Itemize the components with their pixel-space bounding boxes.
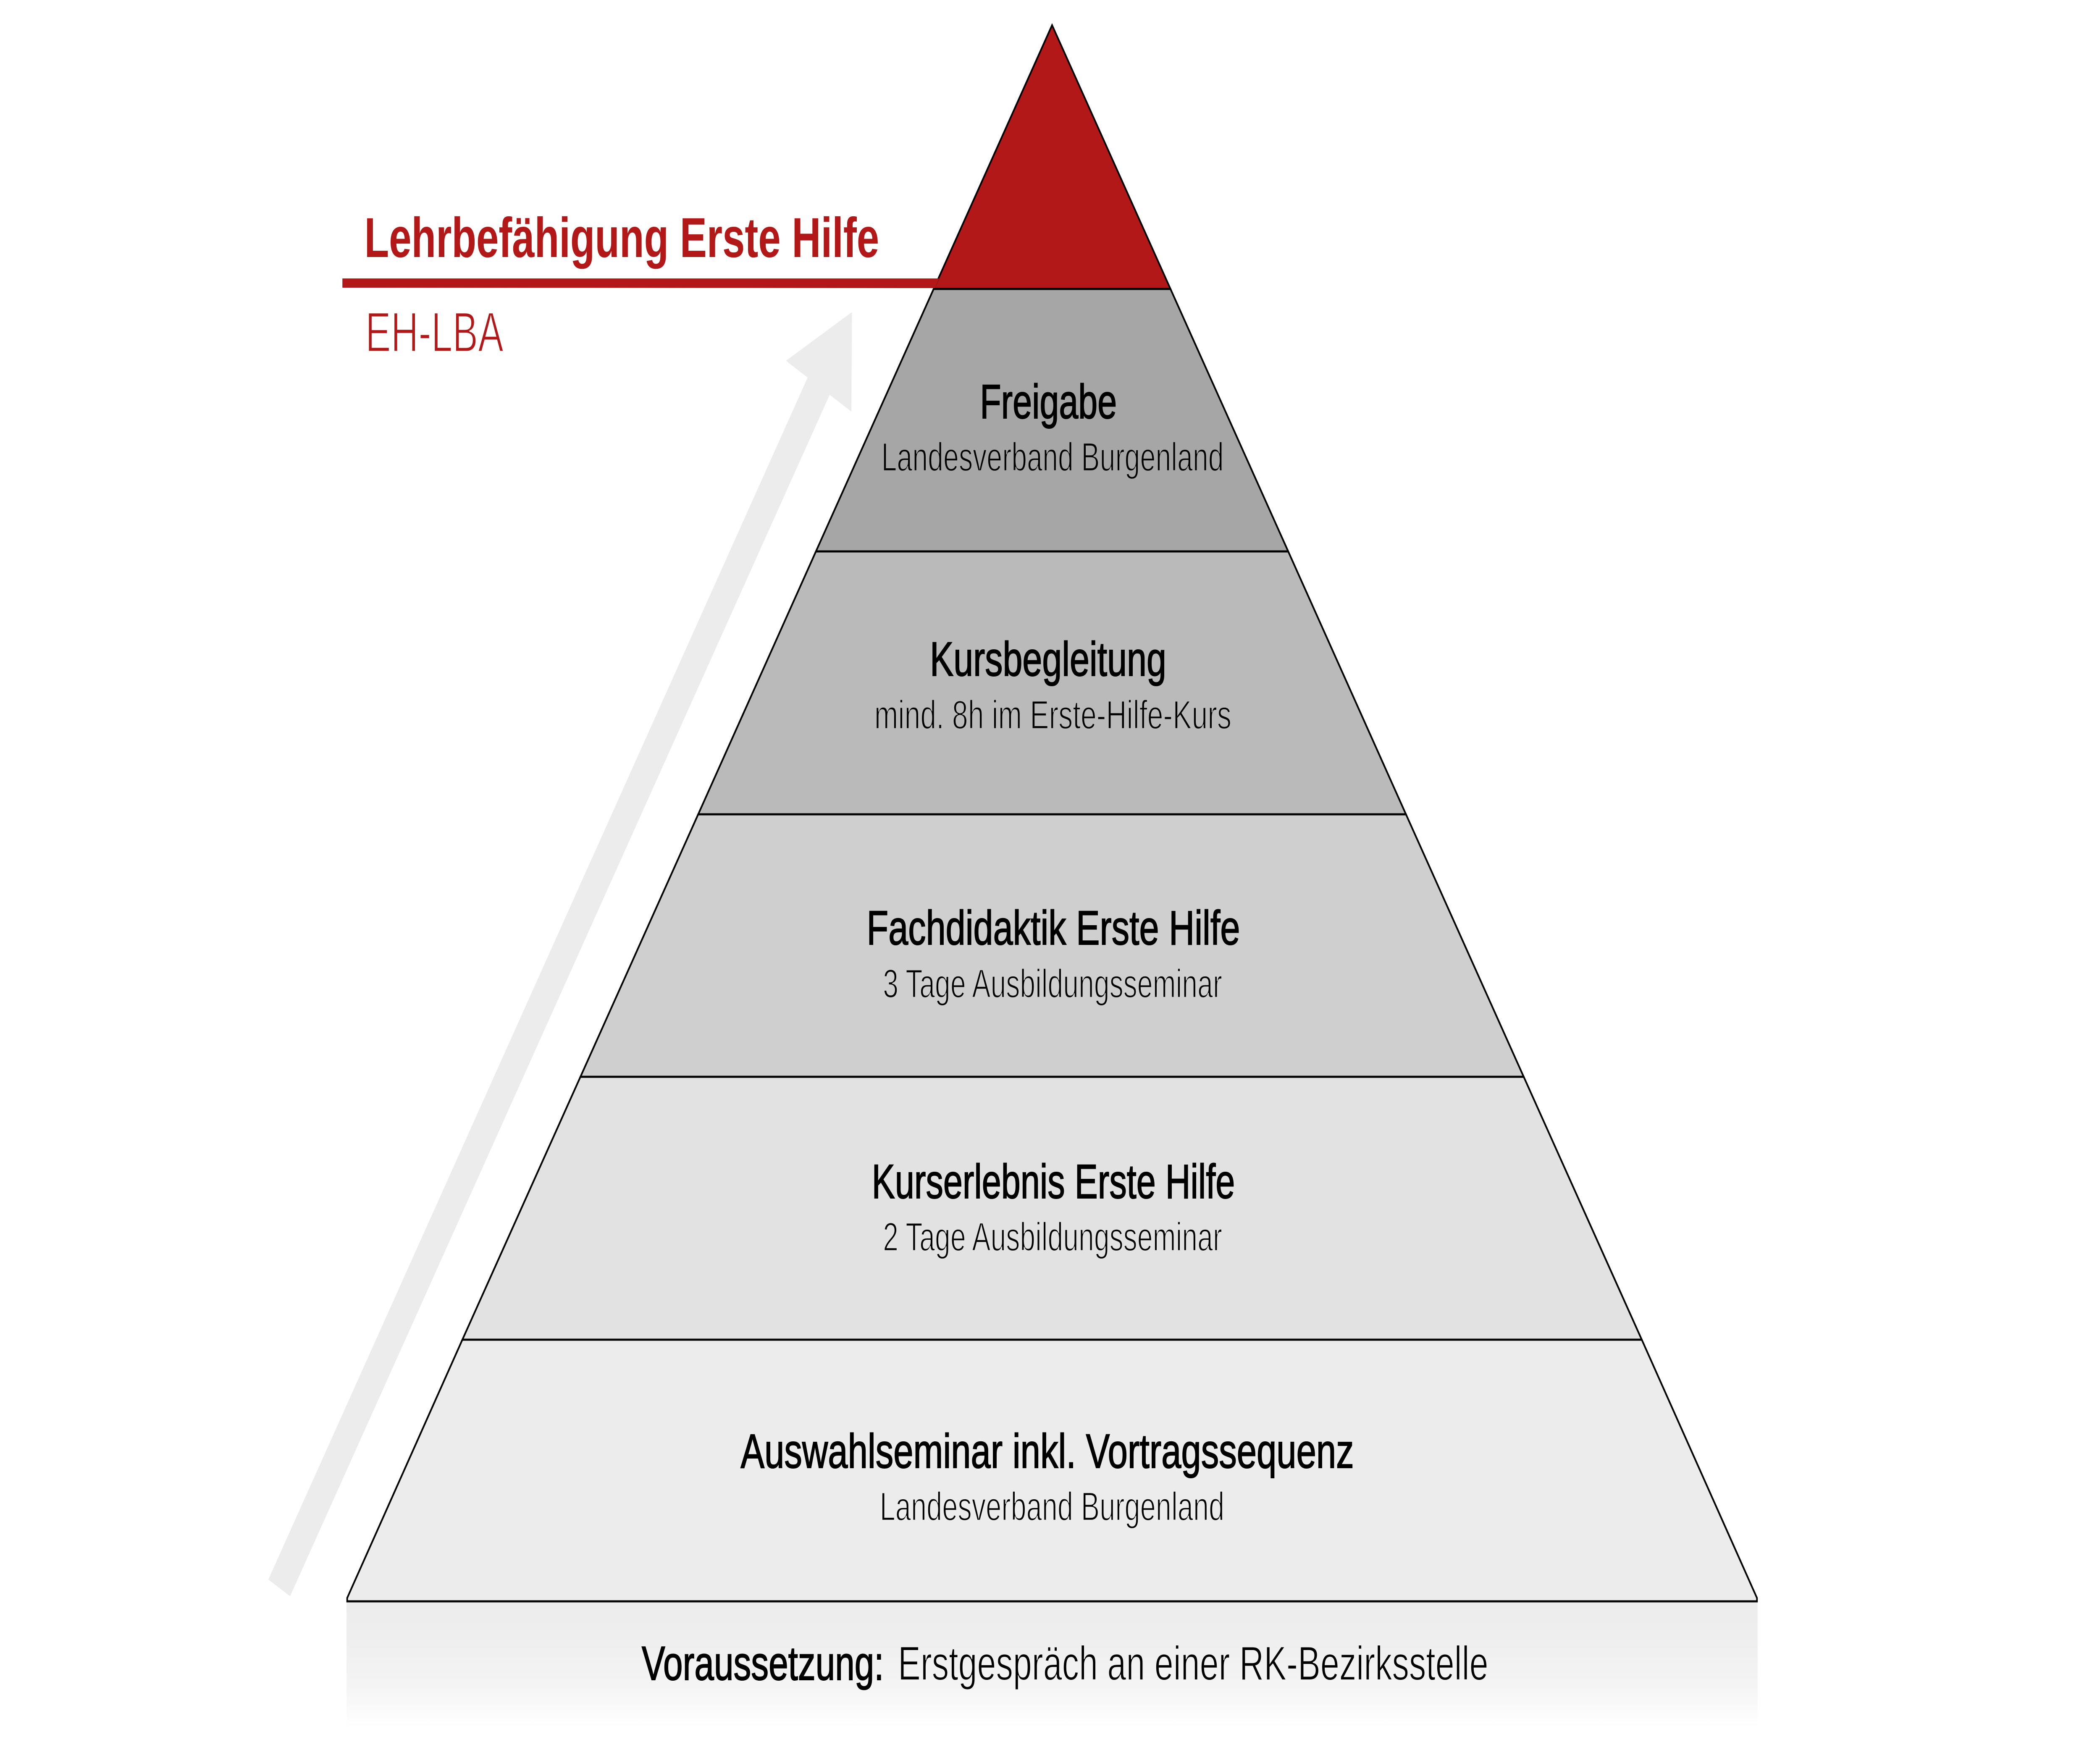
tier: Auswahlseminar bbox=[347, 1340, 1757, 1601]
tier: Fachdidaktik bbox=[580, 814, 1524, 1077]
tier heading: Auswahlseminar: Auswahlseminar inkl. Vortragssequenz bbox=[740, 1424, 1354, 1478]
panel: prerequisite band bbox=[346, 1601, 1758, 1727]
tier subtext: Landesverband Burgenland: Landesverband Burgenland bbox=[881, 435, 1224, 480]
arrow: upward progression bbox=[268, 312, 852, 1596]
panel: pyramid bbox=[347, 25, 1757, 1601]
title: Lehrbefähigung Erste Hilfe bbox=[365, 207, 879, 269]
tier subtext: mind. 8h: mind. 8h im Erste-Hilfe-Kurs bbox=[874, 693, 1231, 737]
tier: Freigabe bbox=[816, 289, 1288, 551]
prerequisite text regular: Erstgespräch an einer RK-Bezirksstelle bbox=[898, 1637, 1488, 1690]
rule: red leader line bbox=[342, 278, 939, 288]
tier: apex red bbox=[934, 25, 1171, 289]
tier heading: Freigabe: Freigabe bbox=[980, 375, 1117, 429]
prerequisite text bold: Voraussetzung: bbox=[642, 1637, 884, 1690]
tier heading: Fachdidaktik: Fachdidaktik Erste Hilfe bbox=[867, 901, 1240, 955]
subtitle: EH-LBA: EH-LBA bbox=[365, 301, 504, 364]
tier subtext: 2 Tage: 2 Tage Ausbildungsseminar bbox=[883, 1215, 1222, 1259]
prerequisite gradient background bbox=[346, 1601, 1758, 1727]
tier heading: Kurserlebnis: Kurserlebnis Erste Hilfe bbox=[872, 1154, 1235, 1209]
tier subtext: 3 Tage: 3 Tage Ausbildungsseminar bbox=[883, 961, 1222, 1006]
tier heading: Kursbegleitung: Kursbegleitung bbox=[930, 632, 1166, 686]
tier: Kursbegleitung bbox=[698, 551, 1406, 814]
tier: Kurserlebnis bbox=[462, 1077, 1642, 1340]
tier subtext: Landesverband Burgenland: Landesverband Burgenland bbox=[880, 1484, 1224, 1529]
